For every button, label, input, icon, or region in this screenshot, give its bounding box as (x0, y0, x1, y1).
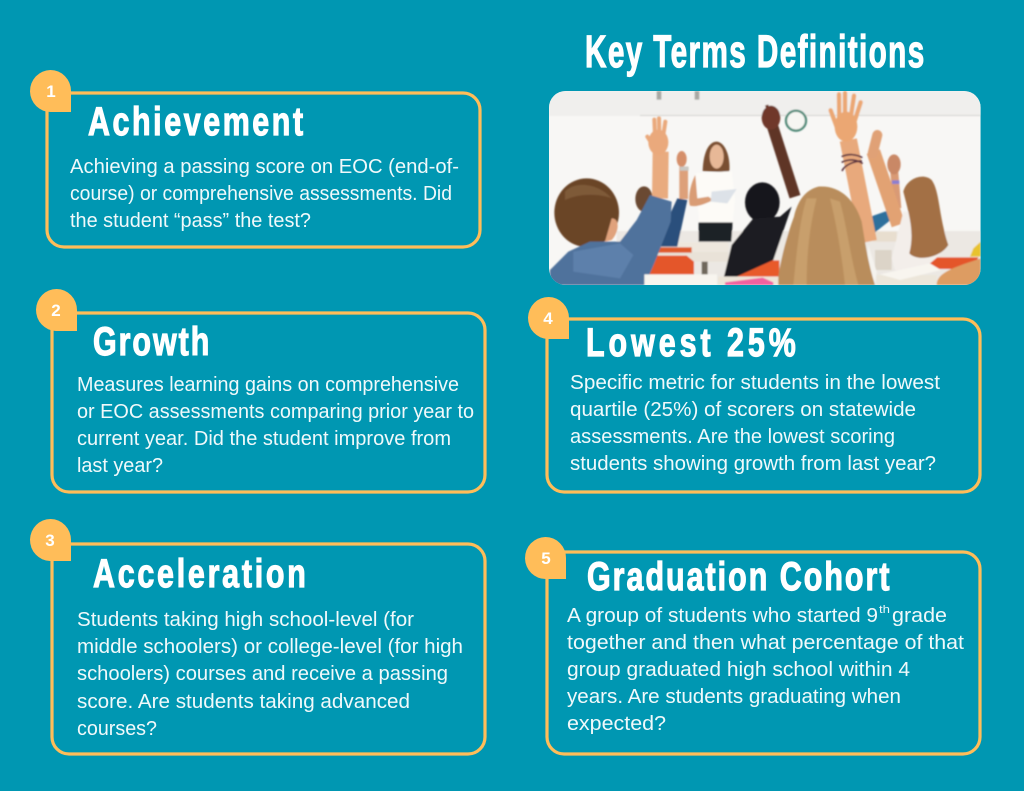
badge 2 (36, 289, 77, 331)
definition text: Students taking high school-level (for (77, 609, 414, 631)
definition text: assessments. Are the lowest scoring (570, 426, 895, 448)
definition text (77, 374, 474, 477)
panel outline (547, 319, 980, 492)
girl with ponytail (873, 152, 898, 225)
panel: Achievement (30, 70, 480, 247)
definition text (77, 609, 463, 740)
desks (678, 242, 728, 251)
definition text: expected? (567, 713, 666, 735)
panel outline (47, 93, 480, 247)
boy in denim (651, 150, 670, 200)
definition text: Specific metric for students in the lowest (570, 372, 940, 394)
definition text (567, 604, 964, 735)
definition text (570, 372, 940, 475)
heading: Graduation Cohort (587, 554, 890, 599)
heading: Growth (93, 319, 209, 364)
panel: Growth (36, 289, 485, 492)
definition text: courses? (77, 718, 157, 740)
panel outline (52, 313, 485, 492)
dark student (773, 127, 795, 197)
badge 5: 5 (541, 549, 551, 568)
definition text: current year. Did the student improve from (77, 428, 451, 450)
orange chairs (657, 247, 692, 253)
back student and arm (635, 186, 653, 212)
right back student (871, 211, 891, 232)
badge 3: 3 (45, 531, 55, 550)
heading: Lowest 25% (586, 320, 796, 365)
definition text: middle schoolers) or college-level (for high (77, 636, 463, 658)
definition text: Achieving a passing score on EOC (end-of- (70, 156, 459, 178)
definition text: years. Are students graduating when (567, 686, 901, 708)
photo: students raising hands in a classroom (549, 91, 981, 285)
badge 1: 1 (46, 82, 56, 101)
heading: Achievement (88, 99, 303, 144)
panel outline (52, 544, 485, 754)
badge 3 (30, 519, 71, 561)
definition text: Measures learning gains on comprehensive (77, 374, 459, 396)
badge 5 (525, 537, 566, 579)
badge 4 (528, 297, 569, 339)
panel outline (547, 552, 980, 754)
heading: Acceleration (93, 551, 306, 596)
definition text: grade (892, 605, 947, 627)
panel: Lowest 25% (528, 297, 980, 492)
title: Key Terms Definitions (585, 27, 924, 78)
definition text (70, 156, 459, 232)
definition text: group graduated high school within 4 (567, 659, 910, 681)
definition text: last year? (77, 455, 163, 477)
definition text: score. Are students taking advanced (77, 691, 410, 713)
blonde student (868, 250, 876, 281)
definition text: th (879, 604, 890, 616)
teacher (703, 142, 730, 172)
panel: Graduation Cohort (525, 537, 980, 754)
blonde girl arm (848, 140, 868, 242)
definition text: students showing growth from last year? (570, 453, 936, 475)
definition text: quartile (25%) of scorers on statewide (570, 399, 916, 421)
definition text: together and then what percentage of that (567, 632, 964, 654)
panel: Acceleration (30, 519, 485, 754)
badge 2: 2 (51, 301, 61, 320)
badge 1 (30, 70, 71, 112)
definition text: A group of students who started 9 (567, 605, 878, 627)
definition text: or EOC assessments comparing prior year to (77, 401, 474, 423)
definition text: the student “pass” the test? (70, 210, 311, 232)
badge 4: 4 (543, 309, 553, 328)
papers and front desks (644, 274, 717, 285)
definition text: course) or comprehensive assessments. Did (70, 183, 452, 205)
definition text: schoolers) courses and receive a passing (77, 663, 448, 685)
